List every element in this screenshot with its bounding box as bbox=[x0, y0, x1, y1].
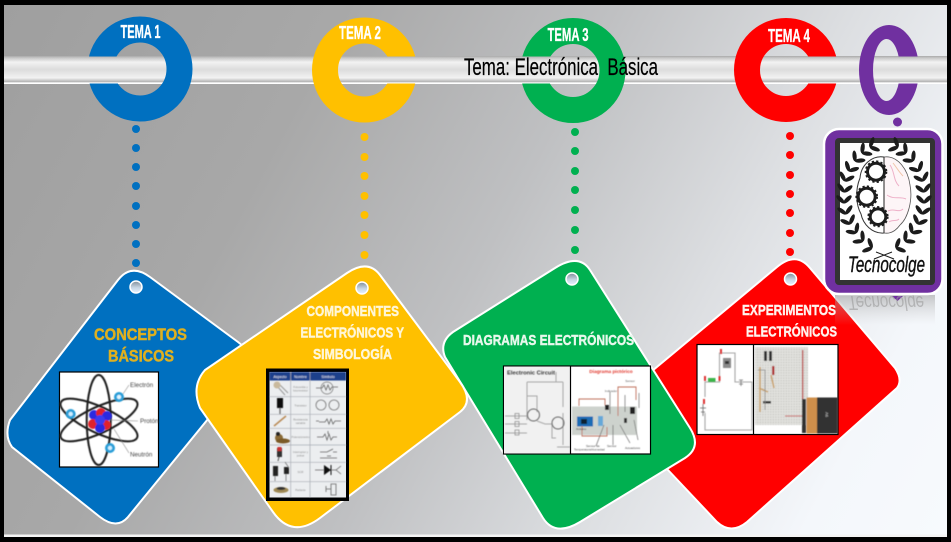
image: circuit diagrams bbox=[504, 366, 650, 454]
ring: tema 3: TEMA 3 bbox=[548, 25, 588, 45]
logo reflection bbox=[835, 291, 935, 325]
image: symbols table: variable bbox=[296, 421, 306, 425]
panel: diagramas electrónicos bbox=[443, 261, 695, 529]
image: atom: Electrón bbox=[130, 382, 154, 389]
ring: tema 4 bbox=[747, 26, 825, 109]
panel: componentes electrónicos y simbología bbox=[196, 266, 467, 527]
connector dot: logo bbox=[893, 118, 902, 126]
title: Tema: Electrónica Básica bbox=[464, 54, 658, 81]
ring: tema 1: TEMA 1 bbox=[120, 22, 160, 42]
image: symbols table: Potenciómetro bbox=[291, 435, 310, 439]
image: circuit diagrams: Sensor de bbox=[586, 444, 600, 448]
panel: componentes electrónicos y simbología: ELECTRÓNICOS Y bbox=[300, 324, 404, 342]
panel: experimentos electrónicos: EXPERIMENTOS bbox=[742, 302, 836, 319]
panel: experimentos electrónicos: ELECTRÓNICOS bbox=[746, 322, 837, 340]
dotted line: tema 2 bbox=[360, 133, 368, 259]
image: symbols table: Nombre bbox=[294, 375, 307, 379]
image: symbols table: SCR bbox=[298, 470, 303, 474]
image: atom: Protón bbox=[140, 418, 159, 425]
image: symbols table: Fotocelda y bbox=[293, 385, 308, 389]
image: atom: Neutrón bbox=[130, 452, 153, 458]
panel: conceptos básicos: CONCEPTOS bbox=[94, 326, 187, 344]
ring: tema 1 bbox=[100, 22, 180, 108]
image: symbols table: fotorresistor bbox=[293, 388, 308, 392]
image: circuit diagrams: Sensor bbox=[607, 444, 617, 448]
panel: diagramas electrónicos: DIAGRAMAS ELECTRÓNICOS bbox=[463, 331, 634, 349]
image: experiment circuit and breadboard bbox=[697, 344, 838, 434]
image: circuit diagrams: Indicador bbox=[605, 389, 617, 393]
icon: laurel wreath and brain bbox=[835, 135, 933, 277]
image: circuit diagrams: Actuadores bbox=[625, 446, 641, 450]
ring: logo connector bbox=[859, 25, 919, 115]
image: symbols table: Resistencia bbox=[293, 418, 308, 422]
ring: tema 3 bbox=[534, 25, 612, 110]
ring: tema 2: TEMA 2 bbox=[339, 23, 381, 43]
logo reflection: Tecnocolge bbox=[848, 291, 924, 313]
panel: componentes electrónicos y simbología: SIMBOLOGÍA bbox=[313, 346, 392, 363]
image: symbols table bbox=[266, 368, 349, 501]
image: symbols table: Símbolo bbox=[321, 375, 335, 379]
image: circuit diagrams: Temperatura/Humedad bbox=[574, 448, 605, 452]
image: symbols table: pulsar bbox=[297, 454, 304, 458]
logo badge bbox=[824, 129, 942, 294]
image: experiment circuit and breadboard: 9V bbox=[824, 412, 829, 417]
image: atom bbox=[55, 372, 159, 467]
pipe bbox=[4, 56, 947, 84]
image: circuit diagrams: Sensor bbox=[625, 379, 635, 383]
image: symbols table: Interruptor y bbox=[293, 450, 309, 454]
frame bottom highlight bbox=[4, 534, 947, 537]
dotted line: tema 3 bbox=[571, 128, 579, 254]
image: symbols table: Transistor bbox=[294, 404, 307, 408]
panel: componentes electrónicos y simbología: COMPONENTES bbox=[306, 303, 399, 320]
image: circuit diagrams: Diagrama pictórico bbox=[589, 369, 633, 375]
dotted line: tema 1 bbox=[132, 125, 140, 267]
image: symbols table: Parlante bbox=[295, 488, 306, 492]
panel: conceptos básicos: BÁSICOS bbox=[108, 346, 174, 366]
image: symbols table: Aspecto bbox=[274, 375, 286, 379]
dotted line: tema 4 bbox=[786, 132, 794, 256]
ring: tema 4: TEMA 4 bbox=[768, 26, 810, 46]
image: circuit diagrams: Electronic Circuit bbox=[507, 370, 555, 376]
ring: tema 2 bbox=[325, 23, 404, 110]
image: circuit diagrams: Arduino bbox=[576, 427, 587, 431]
panel: conceptos básicos bbox=[7, 271, 251, 524]
panel: experimentos electrónicos bbox=[621, 259, 900, 528]
